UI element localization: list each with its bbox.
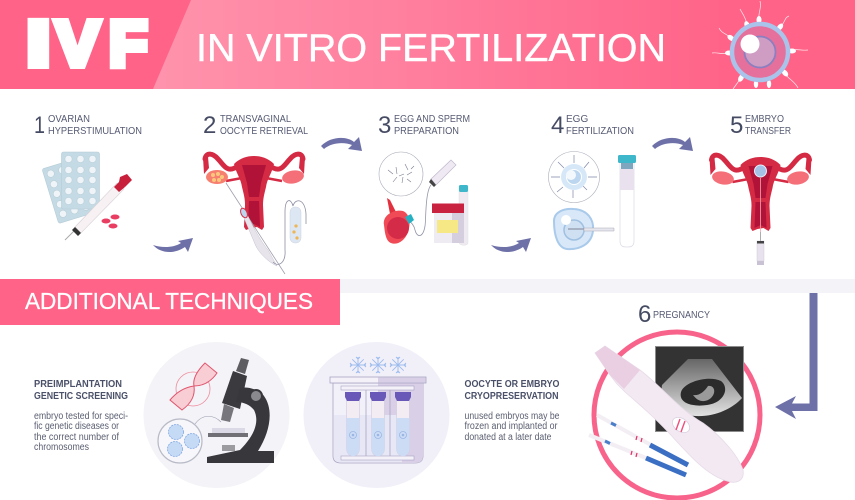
text block: preimplantation: PREIMPLANTATION — [34, 378, 122, 390]
IVF logo text: I — [26, 8, 50, 80]
arrow 2 to 3 — [321, 137, 362, 151]
step 1 label: OVARIAN — [48, 114, 90, 125]
arrow to pregnancy — [775, 293, 818, 419]
petri dish — [158, 416, 221, 463]
arrow 1 to 2 — [153, 238, 193, 252]
step 4 label: 4 — [551, 112, 564, 139]
text block: cryopreservation: CRYOPRESERVATION — [464, 390, 558, 402]
arrow 3 to 4 — [491, 238, 531, 252]
icon: ring with ultrasound and pregnancy test — [589, 332, 760, 498]
arrow 4 to 5 — [652, 137, 693, 151]
step 6 label: 6 — [638, 301, 651, 328]
step 1 label: 1 — [34, 112, 45, 139]
IVF logo text — [26, 8, 147, 80]
step 3: egg and sperm preparation — [378, 112, 470, 245]
step 3 label — [378, 112, 470, 139]
IVF logo text: F — [109, 8, 147, 80]
test strips — [589, 415, 688, 475]
step 3 label: EGG AND SPERM — [394, 114, 470, 125]
IVF badge background — [0, 0, 191, 89]
text block: preimplantation: the correct number of — [34, 432, 119, 443]
step 5 label: EMBRYO — [745, 114, 784, 125]
text block: cryopreservation: donated at a later date — [464, 432, 552, 443]
step 6 label: PREGNANCY — [653, 310, 710, 321]
header band — [0, 0, 855, 89]
icon: pill blisters and injection pen — [42, 152, 132, 240]
step 5: embryo transfer — [710, 112, 812, 265]
step 5 label: TRANSFER — [745, 126, 791, 137]
step 2 label: 2 — [203, 112, 216, 139]
DNA — [170, 363, 217, 410]
icon: egg injection and test tube — [548, 152, 636, 249]
text block: preimplantation: embryo tested for speci- — [34, 411, 128, 422]
step 1 label: HYPERSTIMULATION — [48, 126, 142, 137]
text block: cryopreservation: frozen and implanted or — [464, 421, 558, 432]
step 2 label: OOCYTE RETRIEVAL — [220, 126, 308, 137]
step 3 label: PREPARATION — [394, 126, 459, 137]
IVF logo text: V — [56, 8, 100, 80]
text block: preimplantation: GENETIC SCREENING — [34, 390, 128, 402]
step 5 label — [730, 112, 791, 139]
panel: additional techniques banner — [0, 279, 340, 325]
panel: additional techniques banner: ADDITIONAL TECHNIQUES — [25, 288, 313, 314]
step 1 label — [34, 112, 142, 139]
step 4 label — [551, 112, 634, 139]
microscope — [207, 358, 274, 463]
step 4 label: FERTILIZATION — [566, 126, 634, 137]
text block: preimplantation: fic genetic diseases or — [34, 421, 120, 432]
pregnancy test stick — [595, 346, 743, 482]
icon: uterus with embryo and syringe — [710, 155, 812, 265]
step 2: transvaginal oocyte retrieval — [203, 112, 308, 274]
title: IN VITRO FERTILIZATION — [196, 27, 666, 70]
step 3 label: 3 — [378, 112, 391, 139]
step 2 label: TRANSVAGINAL — [220, 114, 291, 125]
step 2 label — [203, 112, 308, 139]
techniques divider band — [340, 279, 855, 293]
icon: uterus with retrieval needle — [203, 154, 306, 274]
icon: cryopreservation container — [304, 342, 450, 488]
step 5 label: 5 — [730, 112, 743, 139]
step 6 label — [638, 301, 710, 328]
text block: preimplantation: chromosomes — [34, 442, 89, 453]
icon: egg with sperm — [712, 1, 808, 89]
icon: sperm sample, syringe, testis and cup — [379, 152, 468, 245]
text block: cryopreservation — [464, 378, 560, 443]
step 4 label: EGG — [566, 114, 588, 125]
step 6: pregnancy — [589, 301, 760, 498]
step 4: egg fertilization — [548, 112, 636, 249]
text block: preimplantation — [34, 378, 128, 453]
step 1: ovarian hyperstimulation — [34, 112, 142, 240]
ultrasound — [656, 346, 744, 432]
text block: cryopreservation: unused embryos may be — [464, 411, 560, 422]
icon: microscope, DNA and cells — [144, 342, 290, 488]
text block: cryopreservation: OOCYTE OR EMBRYO — [464, 378, 560, 390]
